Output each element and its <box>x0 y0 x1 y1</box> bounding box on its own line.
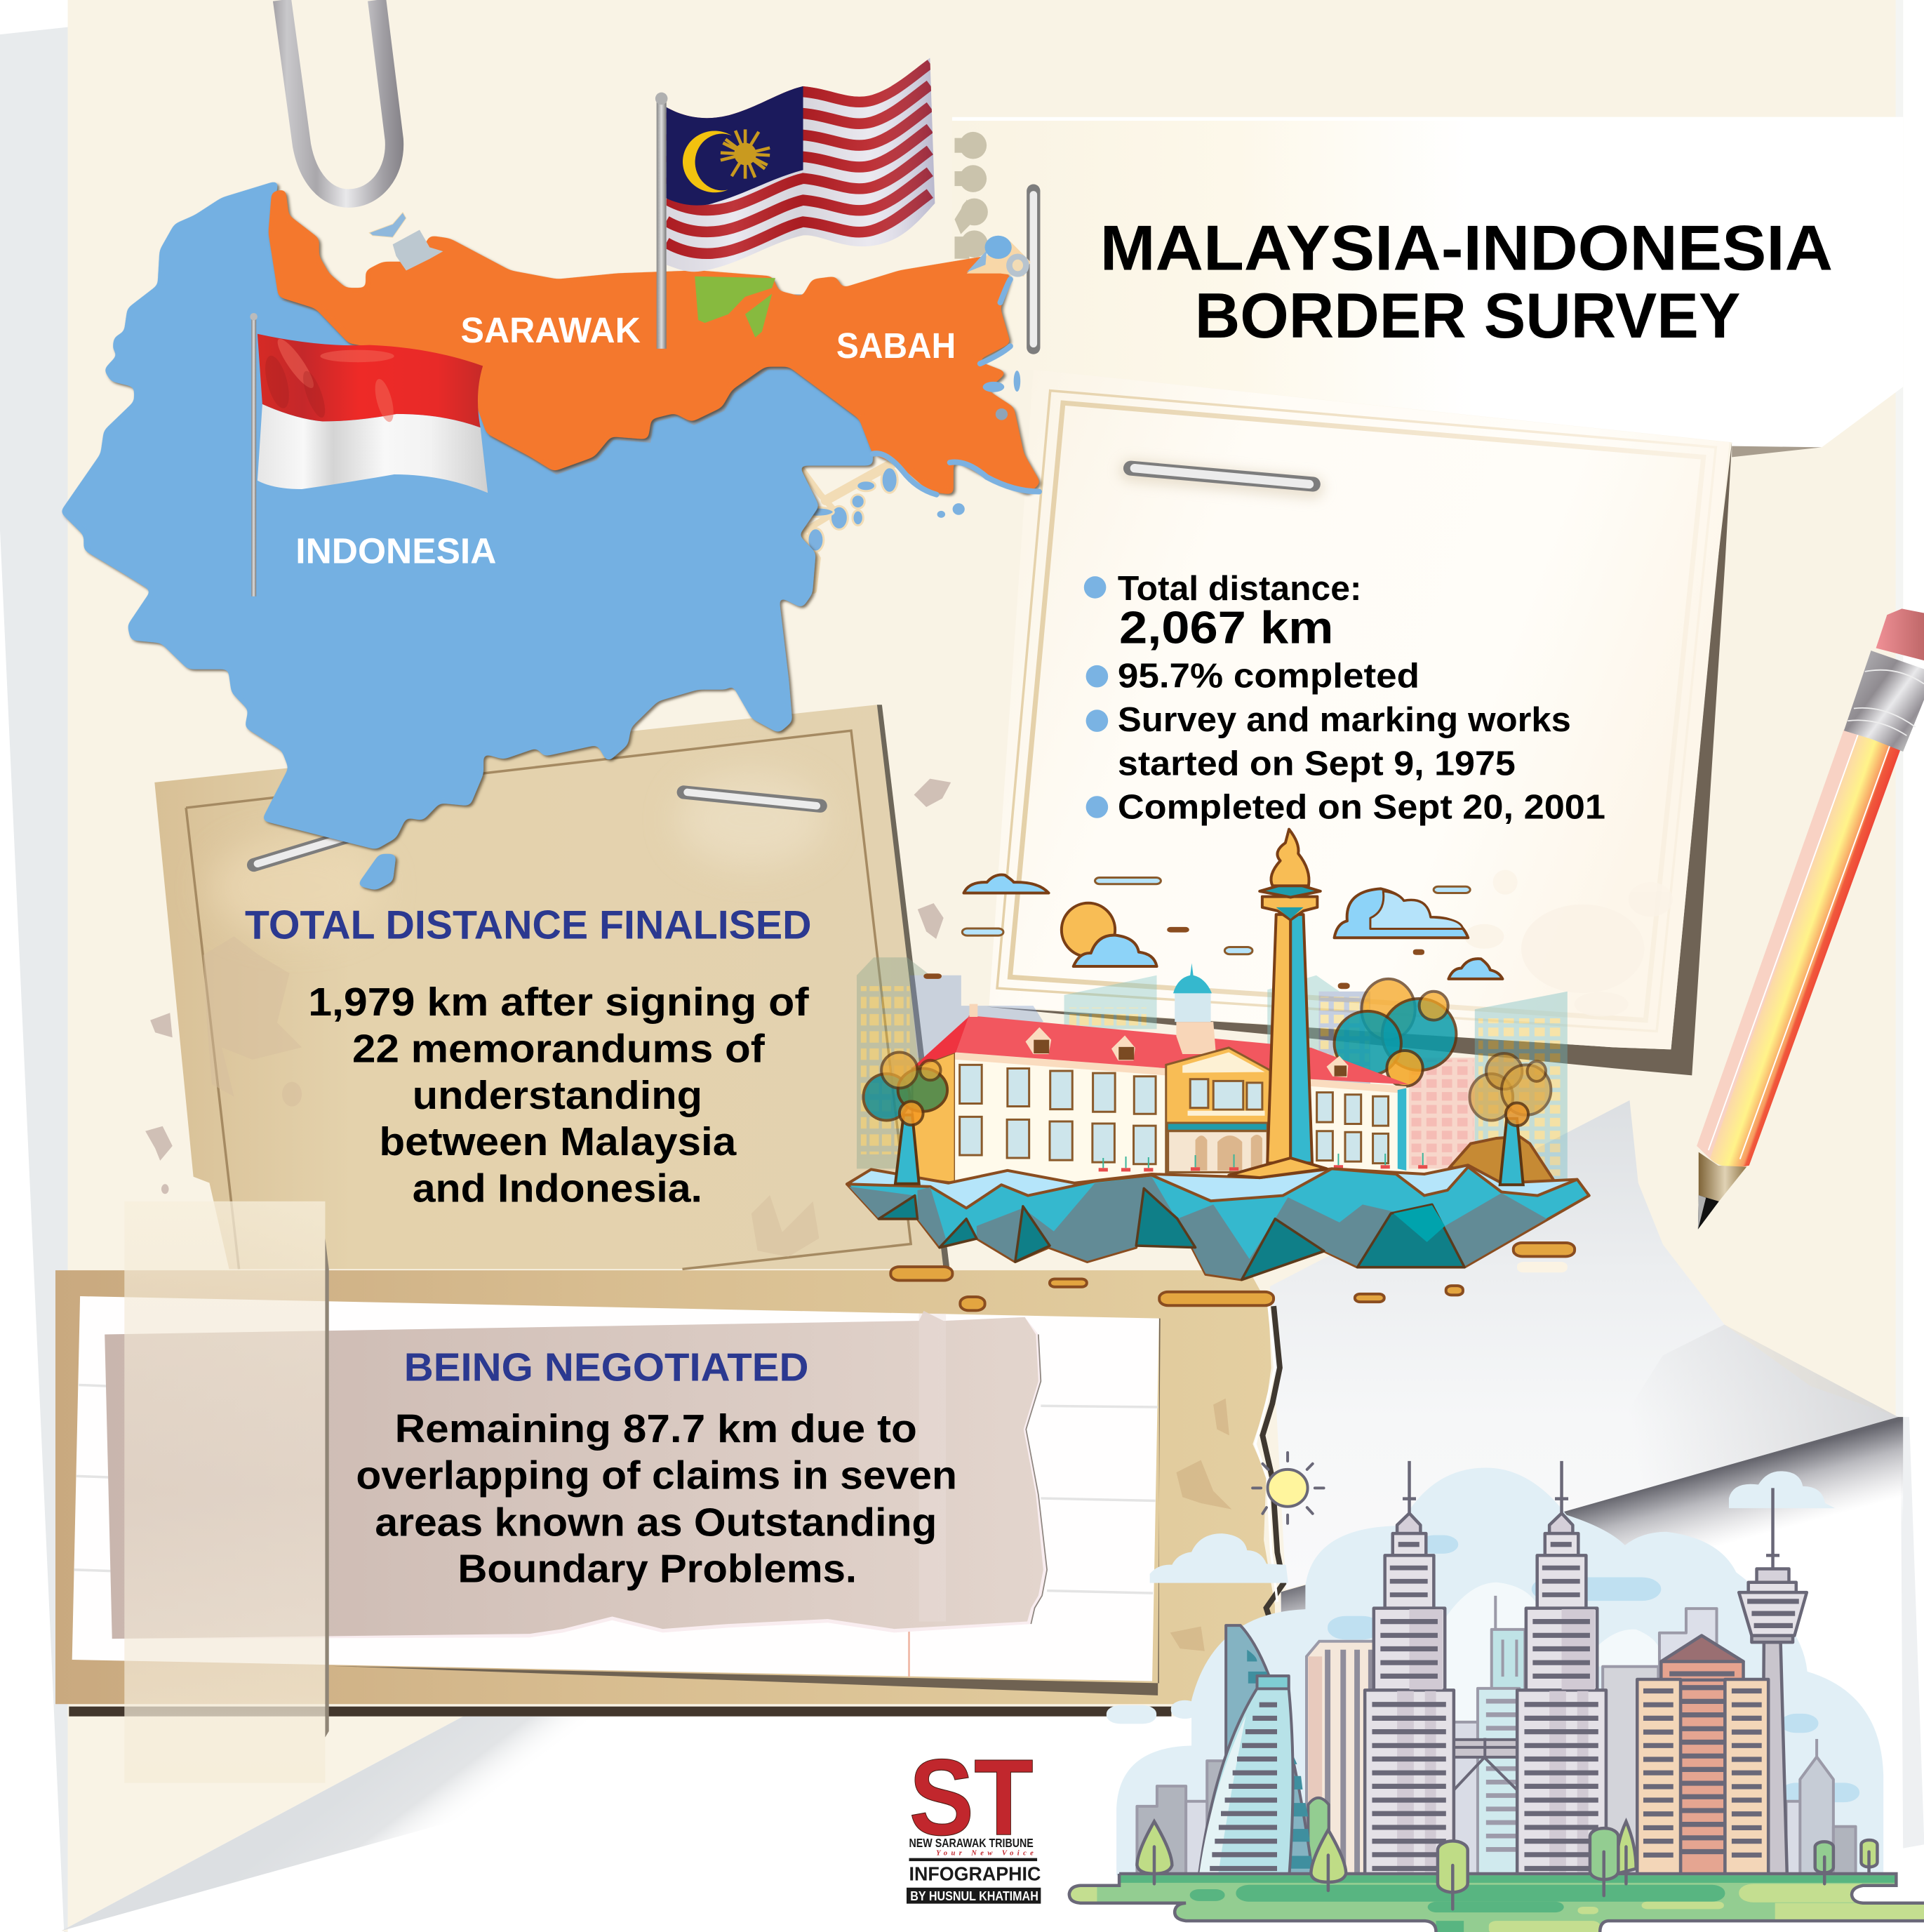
sun <box>1252 1453 1324 1524</box>
flag stripes <box>667 63 930 253</box>
sky capsules <box>962 878 1470 954</box>
torn folder edge <box>1262 1306 1283 1639</box>
text: being negotiated body: areas known as Outstanding <box>375 1500 937 1545</box>
background towers <box>1137 1596 1856 1882</box>
bullet: survey start: started on Sept 9, 1975 <box>1118 745 1516 782</box>
note frame <box>997 391 1716 1032</box>
sail tower <box>1198 1625 1314 1882</box>
central portico <box>1166 1048 1270 1172</box>
green ground <box>1053 1872 1924 1932</box>
map: coast islands east Kalimantan <box>799 460 900 590</box>
pencil ferrule <box>1844 651 1924 752</box>
cloud: sun <box>1074 935 1157 966</box>
bullet: total distance: Total distance: <box>1118 570 1361 608</box>
pencil eraser <box>1876 608 1924 660</box>
building: colonial hall <box>912 963 1409 1183</box>
cloud: large <box>1335 888 1468 938</box>
illustration: Kuala Lumpur skyline <box>1053 1453 1924 1932</box>
page curl: lower left shadow <box>62 1717 828 1931</box>
fact list <box>1084 570 1605 827</box>
punched holes <box>954 132 988 259</box>
text: being negotiated body: Remaining 87.7 km due to <box>395 1406 917 1451</box>
text: being negotiated body: Boundary Problems. <box>457 1546 857 1590</box>
text: being negotiated body: overlapping of claims in seven <box>356 1453 957 1497</box>
staple: note top <box>1130 468 1313 488</box>
note stains <box>1464 870 1673 1016</box>
illustration: Jakarta floating island <box>847 830 1589 1310</box>
logo name: NEW SARAWAK TRIBUNE <box>909 1836 1034 1850</box>
title: MALAYSIA-INDONESIA <box>1100 213 1833 284</box>
roof <box>912 1016 969 1067</box>
street trees <box>1137 1822 1877 1909</box>
staple: beige note right <box>683 792 820 806</box>
cloud: small left <box>964 875 1049 893</box>
map label: Sarawak: SARAWAK <box>461 310 641 350</box>
paper rules <box>74 1385 1158 1593</box>
text: total distance body: between Malaysia <box>379 1119 737 1164</box>
text: total distance body <box>308 980 809 1210</box>
small island south <box>357 854 396 890</box>
map: northern islands <box>369 213 1031 518</box>
torn pink note <box>105 1311 1047 1639</box>
logo: New Sarawak Tribune <box>907 1736 1041 1904</box>
beige note inner frame <box>186 731 911 1269</box>
wall front <box>955 1054 1406 1183</box>
island dark facets <box>879 1188 1464 1279</box>
ghost buildings <box>857 957 1568 1180</box>
staple: title sheet <box>1029 191 1037 347</box>
folder stains <box>1170 1399 1231 1651</box>
panel: folder <box>55 1270 1283 1717</box>
black bar under folder <box>69 1707 1171 1717</box>
logo tagline: Your New Voice <box>936 1849 1034 1857</box>
bullet: completion date: Completed on Sept 20, 2001 <box>1118 789 1605 827</box>
tree: left <box>863 1053 947 1184</box>
folder card <box>55 1270 1276 1704</box>
heading: total distance finalised: TOTAL DISTANCE FINALISED <box>245 902 811 947</box>
white lined paper <box>72 1296 1159 1681</box>
wall left <box>912 1053 955 1183</box>
island rock body <box>847 1167 1589 1279</box>
sun <box>1062 903 1115 957</box>
cloud: left <box>1150 1533 1288 1583</box>
sky backdrop <box>1116 1468 1883 1875</box>
panel: survey facts note <box>987 370 1732 1075</box>
background: pale grey right edge <box>1901 1417 1924 1848</box>
Petronas tower right <box>1517 1461 1606 1882</box>
heading: being negotiated: BEING NEGOTIATED <box>404 1345 808 1390</box>
title <box>1100 213 1833 352</box>
Petronas tower left <box>1365 1461 1454 1882</box>
map: Indonesia (Kalimantan) <box>60 180 873 890</box>
logo mark: ST <box>909 1736 1034 1858</box>
island top surface <box>847 1165 1589 1212</box>
map: border shadow <box>281 295 876 475</box>
map label: Indonesia: INDONESIA <box>295 531 496 571</box>
note shadow <box>987 442 1732 1075</box>
page curl: lower right <box>1270 1100 1903 1811</box>
flag: Indonesia <box>250 313 488 597</box>
staple: beige note left <box>254 835 351 865</box>
right wall teal <box>1398 1088 1406 1171</box>
title page sheet <box>952 117 1903 457</box>
logo infographic label: INFOGRAPHIC <box>909 1863 1041 1884</box>
panel: beige note <box>154 705 949 1269</box>
cloud: right <box>1729 1471 1835 1508</box>
pencil body <box>1697 729 1901 1167</box>
beige note stains <box>203 936 819 1257</box>
skybridge <box>1452 1738 1518 1791</box>
translucent tape <box>124 1201 329 1783</box>
text: total distance body: 22 memorandums of <box>352 1026 765 1070</box>
floating debris capsules <box>890 1243 1575 1310</box>
map: Borneo <box>60 180 1041 890</box>
red band <box>258 334 483 427</box>
tree: right <box>1469 1053 1551 1185</box>
clouds and sun <box>964 875 1502 979</box>
beige note edge shadow <box>877 705 949 1269</box>
flag highlights <box>273 335 397 424</box>
bullet: total distance: 2,067 km <box>1119 601 1333 653</box>
pencil highlight lines <box>1709 731 1891 1159</box>
bullet: completed share: 95.7% completed <box>1118 658 1419 695</box>
dormers <box>1026 1027 1348 1077</box>
cloud puffs <box>1107 1700 1198 1724</box>
pencil lead <box>1698 1195 1719 1230</box>
flag star <box>721 129 770 179</box>
text: total distance body: understanding <box>413 1073 702 1117</box>
bullet: survey start: Survey and marking works <box>1118 701 1571 739</box>
striped tower <box>1307 1641 1375 1882</box>
white band <box>258 404 488 493</box>
logo credit: BY HUSNUL KHATIMAH <box>910 1888 1038 1903</box>
note paper <box>989 370 1730 1049</box>
bullet: survey start <box>1086 701 1571 782</box>
flag field <box>667 58 935 272</box>
windows <box>960 1065 1389 1164</box>
text: total distance body: and Indonesia. <box>413 1166 702 1210</box>
map: Sarawak and Sabah <box>269 189 1041 495</box>
flag pole: Indonesia <box>250 313 258 597</box>
flag: Malaysia <box>655 58 935 349</box>
map label: Sabah: SABAH <box>836 326 956 366</box>
island grey facets <box>849 1177 1546 1279</box>
illustration: pencil <box>1697 608 1924 1230</box>
map: Brunei <box>695 277 775 338</box>
bullet: total distance <box>1084 570 1361 653</box>
flag canton <box>667 86 803 206</box>
potted plants <box>1099 1165 1427 1171</box>
flag shading <box>667 58 935 272</box>
splatter marks <box>145 779 951 1194</box>
text: total distance body: 1,979 km after signing of <box>308 980 809 1024</box>
trees behind building <box>1335 979 1456 1086</box>
paper clip <box>282 0 394 199</box>
cupola <box>1176 1022 1216 1054</box>
text: being negotiated body <box>356 1406 957 1590</box>
cloud: small right <box>1448 959 1502 979</box>
flag pole: Malaysia <box>655 93 667 349</box>
salmon tower <box>1637 1636 1768 1882</box>
paper shadow <box>329 1319 1161 1696</box>
pencil wood <box>1699 1152 1746 1201</box>
background: grey left strip <box>0 27 68 1932</box>
map: Sabah coast blue rim <box>873 279 1039 495</box>
chimney <box>970 1004 977 1017</box>
green tree behind sail <box>1308 1798 1329 1875</box>
monument <box>1229 830 1327 1178</box>
flag crescent <box>683 131 732 192</box>
mountains <box>1450 1136 1556 1183</box>
title: BORDER SURVEY <box>1195 280 1740 352</box>
KL Tower <box>1739 1488 1807 1882</box>
